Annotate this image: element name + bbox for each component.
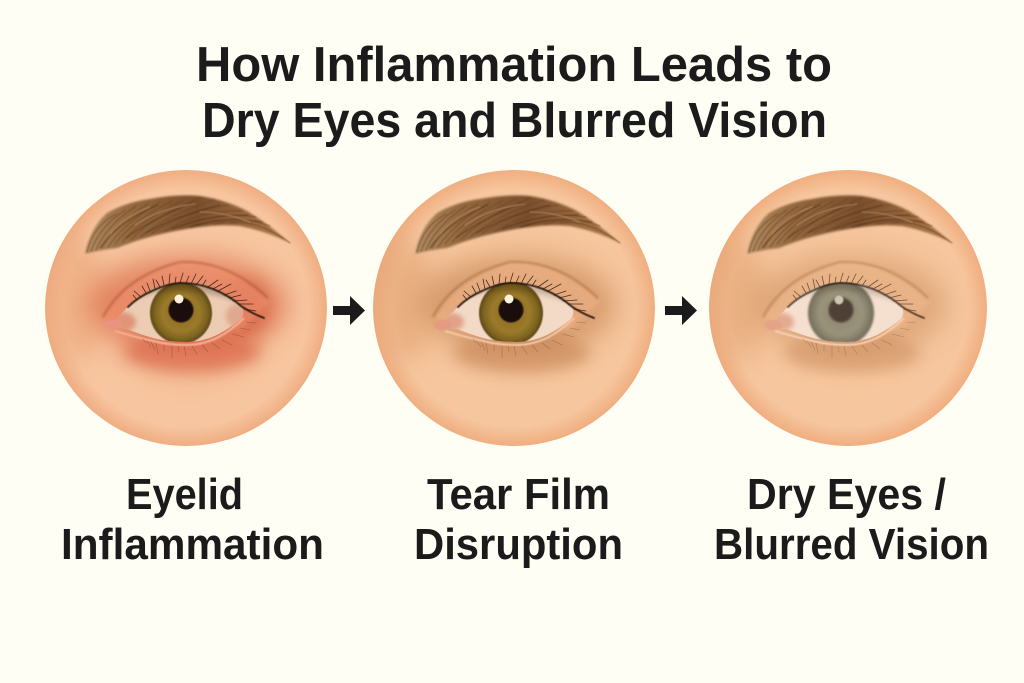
title: How Inflammation Leads to: [196, 38, 832, 92]
panel: tear film disruption eye illustration: [373, 170, 655, 446]
label: dry eyes and blurred vision: Blurred Vision: [714, 520, 989, 569]
arrow: step one to step two: [333, 296, 365, 325]
label: eyelid inflammation: [61, 470, 324, 569]
title: Dry Eyes and Blurred Vision: [202, 94, 827, 148]
label: eyelid inflammation: Eyelid: [126, 470, 243, 519]
panel: inflamed eye illustration: [45, 170, 327, 446]
label: tear film disruption: Tear Film: [427, 470, 610, 519]
arrow: step two to step three: [665, 296, 697, 325]
eye: [430, 262, 600, 358]
label: tear film disruption: [414, 470, 623, 569]
label: dry eyes and blurred vision: Dry Eyes /: [747, 470, 946, 519]
eyebrow: [85, 195, 290, 254]
title: [196, 38, 832, 148]
eye: [100, 262, 270, 358]
panel: dry eyes and blurred vision eye illustration: [709, 170, 987, 446]
eye: [760, 262, 930, 358]
label: dry eyes and blurred vision: [714, 470, 989, 569]
label: eyelid inflammation: Inflammation: [61, 520, 324, 569]
eyebrow: [415, 195, 620, 254]
label: tear film disruption: Disruption: [414, 520, 623, 569]
eyebrow: [747, 195, 952, 254]
